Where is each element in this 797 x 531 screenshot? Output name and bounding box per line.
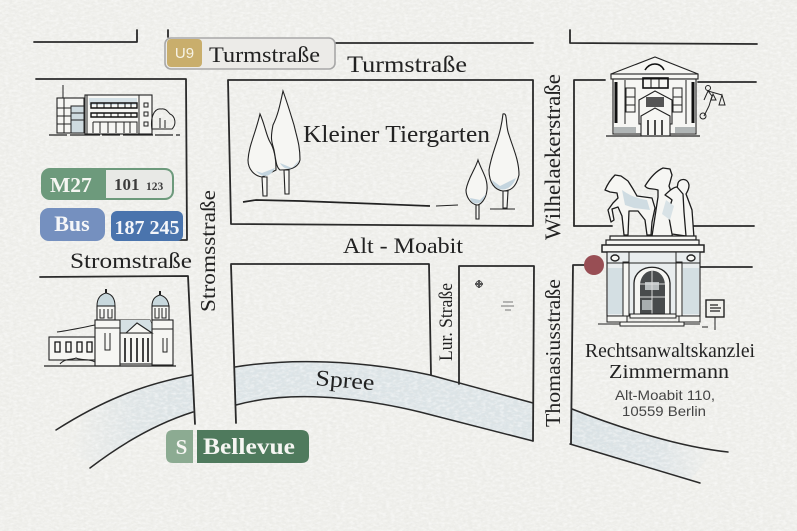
badge: U9 Turmstraße bbox=[165, 38, 335, 69]
street label: Stromsstraße vertical: Stromsstraße bbox=[196, 190, 220, 312]
icon: court building bbox=[606, 57, 700, 136]
icon: justice figure with scales bbox=[700, 86, 725, 119]
badge: Bus 187 245: Bus bbox=[54, 211, 90, 236]
badge: M27 101 123 bbox=[41, 168, 174, 200]
street label: Lur. Straße: Lur. Straße bbox=[436, 283, 457, 361]
badge: U9 Turmstraße: U9 bbox=[175, 45, 194, 62]
second horse bbox=[645, 168, 676, 236]
badge: M27 101 123: M27 bbox=[50, 173, 92, 197]
park: trees bbox=[243, 91, 519, 219]
badge: S Bellevue: S bbox=[176, 435, 187, 459]
firm name: Zimmermann bbox=[609, 361, 729, 383]
park label: Kleiner Tiergarten: Kleiner Tiergarten bbox=[303, 122, 490, 148]
street label: Wilhelaekerstraße vertical: Wilhelaekerstraße bbox=[540, 74, 565, 240]
icon: church bbox=[44, 289, 176, 366]
badge: M27 101 123: 123 bbox=[146, 181, 164, 193]
river label: Spree: Spree bbox=[315, 365, 376, 395]
street label: Stromstraße: Stromstraße bbox=[70, 248, 192, 273]
firm name bbox=[585, 341, 756, 383]
badge: Bus 187 245 bbox=[40, 208, 183, 241]
address: Alt-Moabit 110, bbox=[615, 387, 715, 403]
address: 10559 Berlin bbox=[622, 403, 706, 419]
icon: small map symbols bbox=[475, 280, 514, 310]
badge: M27 101 123: 101 bbox=[114, 175, 140, 194]
icon: location marker bbox=[584, 255, 604, 275]
icon: Moabit horse sculpture bbox=[605, 168, 696, 240]
street outlines bbox=[34, 30, 757, 483]
badge: Bus 187 245: 187 245 bbox=[114, 217, 180, 239]
street label: Alt-Moabit: Alt - Moabit bbox=[343, 233, 463, 258]
third horse bbox=[665, 187, 686, 236]
rider bbox=[674, 179, 694, 238]
badge: U9 Turmstraße: Turmstraße bbox=[209, 42, 320, 67]
first horse bbox=[605, 175, 655, 235]
street label: Thomasiusstraße vertical: Thomasiusstraße bbox=[541, 279, 565, 427]
street label: Turmstraße: Turmstraße bbox=[347, 52, 467, 77]
firm name: Rechtsanwaltskanzlei bbox=[585, 341, 756, 362]
address bbox=[615, 387, 715, 419]
badge: S Bellevue bbox=[166, 430, 309, 463]
badge: S Bellevue: Bellevue bbox=[203, 434, 295, 459]
icon: law firm gate bbox=[598, 240, 704, 326]
icon: office building bbox=[49, 85, 180, 135]
icon: sign board bbox=[702, 300, 724, 330]
river: Spree segments bbox=[70, 362, 715, 480]
